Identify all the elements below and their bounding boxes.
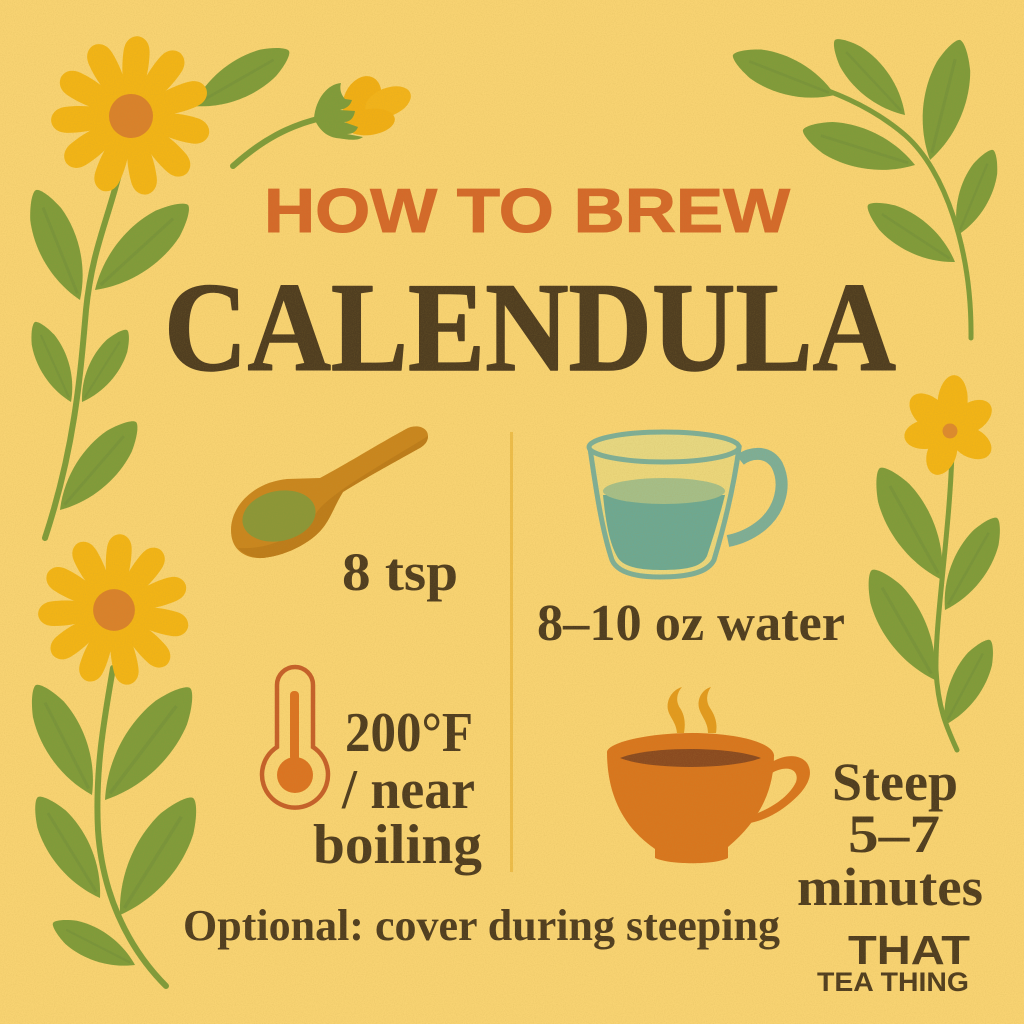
icon: thermometer — [262, 667, 328, 808]
text: temperature: 200°F — [345, 702, 473, 764]
divider — [510, 432, 513, 872]
text: water amount: 8–10 oz water — [537, 595, 845, 652]
title: calendula: CALENDULA — [164, 258, 896, 398]
text: amount: 8 tsp — [342, 542, 458, 602]
heading: how to brew: HOW TO BREW — [264, 177, 791, 246]
icon: glass of water — [589, 432, 782, 577]
text: temperature: boiling — [313, 814, 482, 876]
text: temperature: / near — [341, 759, 475, 821]
illustration: right flower — [853, 374, 1012, 750]
text: temperature — [313, 702, 482, 876]
icon: steaming cup — [607, 687, 810, 863]
illustration: top-left flower stem — [17, 35, 298, 538]
illustration: calendula bud — [233, 70, 415, 166]
text: steep time — [797, 752, 983, 917]
text: steep time: minutes — [797, 857, 983, 917]
text: optional note: Optional: cover during steeping — [183, 901, 780, 950]
logo: that tea thing: TEA THING — [817, 967, 969, 997]
illustration: bottom-left flower — [17, 533, 213, 986]
logo: that tea thing: THAT — [848, 927, 970, 973]
illustration: top-right branch — [726, 28, 1007, 338]
logo: that tea thing — [817, 927, 970, 997]
text: steep time: 5–7 — [848, 804, 940, 864]
icon: wooden spoon — [231, 426, 428, 558]
text: steep time: Steep — [832, 752, 958, 812]
